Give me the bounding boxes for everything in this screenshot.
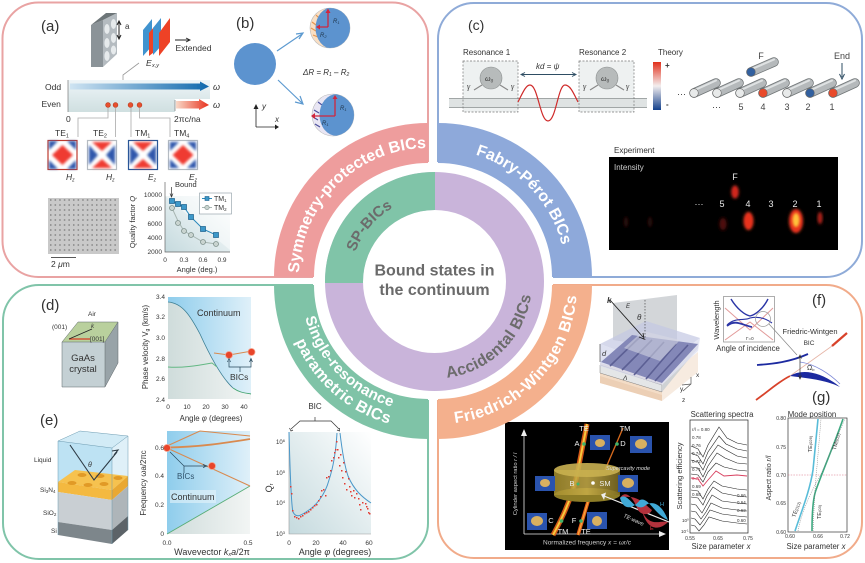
chart: Q factor vs angle: 0 [287,540,291,547]
chart: scattering spectra: 0.55 [685,536,695,542]
field maps [48,128,198,184]
chart: Q factor vs angle [264,402,373,557]
chart: mode position: TE(03) [817,504,823,519]
chart: Q factor vs angle: 10 [276,532,283,538]
experiment intensity image: 3 [768,199,774,209]
chart: scattering spectra: 0.78 [692,435,701,440]
panel: symmetry-protected frame [2,2,428,277]
experiment intensity image: 4 [745,199,751,209]
icon: x y axes: y [261,102,267,111]
experiment intensity image [609,146,838,250]
experiment intensity image: ··· [694,199,704,209]
icon: layered slab in liquid: 2 [54,512,57,517]
chart: Q factor vs angle: 40 [339,540,347,547]
band diagram: 2πc/na [174,114,201,124]
icon: layered slab in liquid: Si [40,487,46,494]
label: Friedrich-Wintgen BICs: Friedrich-Wintgen BICs [454,296,576,423]
centre title: Bound states in [374,262,495,280]
icon: photonic crystal slab: a [125,22,130,31]
chart: scattering spectra: 0.62 [737,508,746,513]
chart: mode position: 0.66 [813,534,823,540]
chart: quality factor vs angle: Bound [175,180,197,189]
label g: (g) [812,389,830,406]
chart: quality factor vs angle: Angle (deg.) [177,265,218,274]
panel: Friedrich-Wintgen frame [438,285,862,558]
image: supercavity mode map: TM [558,527,568,536]
chart: mode position: 0.60 [776,530,786,536]
icon: upper perturbed circle: R [320,33,324,39]
chart: scattering spectra: Size parameter x [692,542,752,551]
chart: frequency vs wavevector: 0.2 [155,502,164,509]
field map TE1 [48,140,77,170]
waveguide resonator schematic: ω [485,74,491,83]
chart: Q factor vs angle: 10 [276,501,283,507]
label e: (e) [40,412,58,429]
chart: frequency vs wavevector [139,431,253,558]
icon: layered slab in liquid: Si [51,528,57,535]
formula: delta R: – R [332,68,347,77]
chart: frequency vs wavevector: 0.4 [155,473,164,480]
chart: phase velocity vs angle: 10 [183,404,191,411]
field maps: H [106,172,112,182]
icon: grating device [600,295,700,404]
icon: x y axes [254,102,280,130]
chart: mode position: Mode position [788,410,836,419]
chart: quality factor vs angle: 2 [224,207,227,212]
chart: mode position: Size parameter x [787,542,847,551]
image: supercavity mode map [505,422,669,550]
chart: quality factor vs angle [128,180,232,274]
label: Friedrich-Wintgen BIC [782,327,838,347]
icon: lower perturbed circle: R [322,121,326,127]
waveguide resonator schematic: ω [601,74,607,83]
chart: mode position: 0.70 [776,473,786,479]
centre title: the continuum [379,282,490,299]
field maps: z [194,178,198,184]
chart: scattering spectra: 0.74 [692,451,701,456]
label a: (a) [41,18,59,35]
icon: extended field layers: Extended [176,43,212,53]
image: supercavity mode map: B [569,479,575,488]
label f: (f) [812,292,826,309]
experiment intensity image: Experiment [614,146,655,155]
experiment intensity image: 5 [719,199,725,209]
chart: phase velocity vs angle: Continuum [197,308,241,318]
waveguide array diagram: 3 [784,102,790,112]
chart: scattering spectra: 0.71 [692,467,701,472]
icon: extended field layers [123,18,212,82]
waveguide array diagram: 2 [805,102,811,112]
waveguide array diagram: 1 [829,102,835,112]
chart: scattering spectra: 0.72 [692,459,701,464]
waveguide resonator schematic: γ [467,82,471,91]
chart: Q factor vs angle: 4 [283,499,286,504]
chart: scattering spectra: Scattering spectra [691,410,754,419]
sector: symmetry-protected [274,123,428,277]
image: supercavity mode map: H [660,502,664,508]
chart: Q factor vs angle: 5 [283,469,286,474]
chart: phase velocity vs angle: 2.6 [156,376,165,383]
chart: phase velocity vs angle: g [145,328,151,331]
chart: frequency vs wavevector: x [227,552,231,558]
image: supercavity mode map: TE [581,527,591,536]
field maps: TE [93,128,104,138]
image: supercavity mode map: SM [599,479,611,488]
icon: grating device: d [602,349,607,358]
image: supercavity mode map: E [650,526,654,532]
band diagram: 0 [66,114,71,124]
experiment intensity image: 1 [816,199,822,209]
chart: quality factor vs angle: TM [214,205,224,212]
label: Single-resonance: Single-resonance [306,316,393,406]
field maps: z [71,178,75,184]
chart: scattering spectra: 0.66 [737,493,746,498]
chart: quality factor vs angle: 1 [224,198,227,203]
field maps: TE [55,128,66,138]
icon: grating device: Λ [622,375,627,382]
image: supercavity mode map: F [572,516,577,525]
centre title [374,262,495,299]
experiment intensity image: Intensity [614,163,644,172]
label b: (b) [236,15,254,32]
chart: scattering spectra: 10 [681,529,686,534]
chart: quality factor vs angle: 8000 [148,206,162,213]
icon: grating device: y [680,386,684,393]
chart: frequency vs wavevector: 0 [160,531,164,538]
inset: wavelength vs angle: Γ=0 [746,336,754,341]
icon: grating device: k [607,296,612,305]
waveguide resonator schematic: 0 [607,80,610,84]
panel: single-resonance frame [3,285,428,559]
chart: quality factor vs angle: 0.9 [217,257,227,264]
chart: Q factor vs angle: Q [264,485,274,492]
chart: mode position [766,410,850,551]
icon: grating device: x [696,372,700,379]
chart: phase velocity vs angle: 2.8 [156,356,165,363]
icon: GaAs crystal block: (001) [52,324,67,331]
chart: Q factor vs angle: 10 [276,471,283,477]
chart: scattering spectra: r/l = 0.80 [692,427,710,432]
chart: quality factor vs angle: 0.6 [198,257,208,264]
sector: single-resonance [274,285,428,439]
chart: Q factor vs angle: Angle φ (degrees) [299,547,371,557]
chart: mode position: TE(026) [808,435,814,452]
chart: scattering spectra: 0.64 [737,500,746,505]
arrow: to upper circle [277,33,303,51]
icon: extended field layers: x,y [151,63,160,69]
central ring [274,123,592,439]
chart: phase velocity vs angle: 40 [240,404,248,411]
field maps: E [189,172,195,182]
field maps: z [153,178,157,184]
chart: phase velocity vs angle: Phase velocity V [141,331,150,389]
legend: theory colour bar: Theory [658,48,683,57]
icon: GaAs crystal block: GaAs [71,353,95,364]
image: supercavity mode map: A [574,439,580,448]
label: Friedrich-Wintgen BIC: Friedric-Wintgen [782,327,838,336]
waveguide resonator schematic: Resonance 2 [579,48,627,57]
chart: frequency vs wavevector: Continuum [171,492,215,502]
chart: mode position: 0.60 [785,534,795,540]
chart: scattering spectra: 0 [687,518,689,522]
ring: accidental BICs purple [344,191,525,372]
chart: scattering spectra: 0.68 [692,492,701,497]
icon: GaAs crystal block: Air [88,311,97,318]
chart: mode position: 0.75 [776,445,786,451]
chart: mode position: 0.65 [776,501,786,507]
chart: quality factor vs angle: 2000 [148,249,162,256]
chart: quality factor vs angle: 10000 [144,192,162,199]
field map TE2 [88,140,116,170]
inset: wavelength vs angle [712,296,797,355]
chart: phase velocity vs angle: 3.0 [156,335,165,342]
label: Accidental BICs: Accidental BICs [447,295,530,378]
band diagram: ω [213,82,220,92]
waveguide resonator schematic: kd = ψ [536,62,560,71]
icon: lower perturbed circle [311,94,354,136]
panel c: Fabry-Perot example [449,17,855,250]
waveguide array diagram: 5 [738,102,744,112]
chart: quality factor vs angle: Quality factor Q [128,196,137,248]
legend: theory colour bar: - [666,100,669,109]
chart: phase velocity vs angle: Angle φ (degrees) [180,414,243,423]
experiment intensity image: 2 [792,199,798,209]
band diagram: Odd [45,82,61,92]
waveguide array diagram [677,51,855,112]
icon: upper perturbed circle: R [333,19,337,25]
chart: frequency vs wavevector: 0.0 [162,540,172,547]
label d: (d) [41,297,59,314]
chart: scattering spectra: 0.76 [692,443,701,448]
waveguide resonator schematic: γ [626,82,630,91]
icon: GaAs crystal block: crystal [69,364,97,375]
icon: grating device: z [682,397,685,404]
waveguide array diagram: ··· [677,89,686,99]
label: Fabry-Perot BICs: Fabry-Pérot BICs [476,144,570,244]
chart: frequency vs wavevector: Wavevector k [174,547,228,557]
formula: delta R: 2 [346,72,350,78]
waveguide resonator schematic: 0 [491,80,494,84]
image: supercavity mode map: TM [620,424,630,433]
chart: frequency vs wavevector: a [231,547,236,557]
field maps: H [66,172,72,182]
image: supercavity mode map: TE-wave [622,513,644,528]
chart: mode position: 0.72 [840,534,850,540]
waveguide resonator schematic: Resonance 1 [463,48,511,57]
chart: scattering spectra: 0.60 [737,518,746,523]
chart: Q factor vs angle: 6 [283,438,286,443]
inset: wavelength vs angle: Wavelength [712,300,721,340]
icon: GaAs crystal block [52,311,118,387]
chart: quality factor vs angle: 0 [163,257,167,264]
legend: theory colour bar [653,48,683,110]
chart: avoided crossing dispersion: Ω [807,365,812,372]
waveguide array diagram: 4 [760,102,766,112]
chart: scattering spectra: -1 [686,528,689,532]
chart: frequency vs wavevector: 0.6 [155,445,164,452]
chart: scattering spectra: 0.69 [692,484,701,489]
icon: lower perturbed circle: 1 [344,107,347,112]
band diagram [42,80,220,137]
ring sector: SP-BICs green [325,172,435,283]
chart: frequency vs wavevector: Frequency ωa/2πc [139,450,148,516]
chart: scattering spectra: 0.65 [713,536,723,542]
icon: photonic crystal slab [91,13,130,67]
sector: Fabry-Perot [438,123,592,277]
chart: phase velocity vs angle: 3.2 [156,314,165,321]
chart: phase velocity vs angle: 2.4 [156,397,165,404]
experiment intensity image: F [732,172,738,182]
chart: Q factor vs angle: r [269,483,275,485]
icon: GaAs crystal block: [001] [90,336,105,343]
icon: lower perturbed circle: 1 [326,122,329,127]
label: Friedrich-Wintgen BIC: BIC [804,340,815,347]
image: supercavity mode map: D [620,439,626,448]
image: supercavity mode map: Normalized frequency x = ωr/c [543,540,632,546]
chart: scattering spectra: 0.75 [743,536,753,542]
icon: layered slab in liquid [34,431,128,544]
image: supercavity mode map: Supercavity mode [606,466,650,472]
chart: Q factor vs angle: 60 [365,540,373,547]
icon: x y axes: x [274,115,280,124]
field maps: 2 [104,134,107,140]
waveguide array diagram: End [834,51,850,61]
panel: Fabry-Perot frame [438,3,862,277]
panel a: symmetry-protected example [41,13,232,274]
chart: scattering spectra: 10 [682,518,687,523]
chart: phase velocity vs angle: (km/s) [141,304,150,329]
chart: quality factor vs angle: TM [214,196,224,203]
chart: Q factor vs angle: BIC [308,402,322,411]
icon: unperturbed circle [234,43,276,85]
field maps: 1 [66,134,69,140]
chart: frequency vs wavevector: BICs [177,472,194,481]
chart: quality factor vs angle: 6000 [148,221,162,228]
field maps: 1 [147,134,150,140]
icon: lower perturbed circle: R [340,106,344,112]
icon: layered slab in liquid: θ [88,462,92,469]
image: supercavity mode map: Cylinder aspect ratio r / l [513,452,519,515]
chart: Q factor vs angle: 3 [283,530,286,535]
chart: phase velocity vs angle: 0 [166,404,170,411]
field maps: z [111,178,115,184]
micrograph with scale bar [48,198,119,269]
icon: extended field layers: E [146,58,152,68]
field map TM4 [168,140,198,170]
icon: upper perturbed circle: 1 [337,20,340,25]
chart: phase velocity vs angle [141,294,255,423]
panel e: slab stack and charts [34,402,373,558]
chart: Q factor vs angle: 10 [276,440,283,446]
field maps: E [148,172,154,182]
chart: frequency vs wavevector: /2π [236,547,250,557]
icon: layered slab in liquid: N [48,487,53,494]
icon: upper perturbed circle [310,7,350,49]
field maps: TM [135,128,147,138]
panel d: GaAs crystal and phase velocity chart [41,294,255,423]
waveguide resonator schematic: γ [583,82,587,91]
waveguide array diagram: ··· [712,102,721,112]
panel b: perturbed circle diagram [234,7,354,136]
image: supercavity mode map: C [548,516,554,525]
label: SP-BICs: SP-BICs [347,202,392,251]
band diagram: Even [42,99,61,109]
image: supercavity mode map: TE [579,424,589,433]
chart: mode position: TE(012) [791,500,803,518]
formula: delta R: 1 [329,72,332,78]
chart: scattering spectra: 0.70 [692,476,701,481]
chart: avoided crossing dispersion [756,333,847,400]
chart: mode position: Aspect ratio r/l [766,455,773,500]
chart: quality factor vs angle: 4000 [148,235,162,242]
chart: scattering spectra: Scattering efficiency [675,442,684,509]
chart: phase velocity vs angle: BICs [230,372,248,382]
icon: layered slab in liquid: 4 [53,489,56,494]
waveguide resonator schematic: γ [511,82,515,91]
icon: upper perturbed circle: 2 [323,34,327,39]
chart: scattering spectra [675,410,754,551]
chart: quality factor vs angle: 0.3 [179,257,189,264]
field maps: 4 [186,134,189,140]
chart: phase velocity vs angle: 3.4 [156,294,165,301]
chart: phase velocity vs angle: 30 [221,404,229,411]
chart: avoided crossing dispersion: b [812,367,815,372]
inset: wavelength vs angle: Angle of incidence [716,344,780,353]
waveguide resonator schematic [449,48,647,121]
field maps: TM [174,128,186,138]
waveguide array diagram: F [758,51,764,61]
chart: phase velocity vs angle: 20 [202,404,210,411]
label c: (c) [468,17,484,33]
icon: layered slab in liquid: Liquid [34,457,52,464]
sector: Friedrich-Wintgen [438,285,592,439]
icon: GaAs crystal block: k [91,324,95,330]
legend: theory colour bar: + [665,61,670,70]
label: parametric BICs: parametric BICs [293,338,390,423]
micrograph with scale bar: 2 μm [51,259,70,269]
icon: grating device: E [626,304,631,310]
icon: layered slab in liquid: SiO [43,510,54,517]
arrow: to lower circle [278,80,303,104]
chart: mode position: 0.80 [776,416,786,422]
field map TM1 [128,140,158,170]
label: Symmetry-protected BICs: Symmetry-protected BICs [288,138,426,272]
panel f: grating device and dispersion [505,292,850,551]
chart: Q factor vs angle: 20 [312,540,320,547]
icon: layered slab in liquid: 3 [46,489,49,494]
chart: mode position: TM(012) [832,432,842,451]
band diagram: ω [213,100,220,110]
chart: frequency vs wavevector: 0.5 [243,540,253,547]
formula: delta R: ΔR = R [303,68,329,77]
icon: grating device: θ [637,313,642,322]
